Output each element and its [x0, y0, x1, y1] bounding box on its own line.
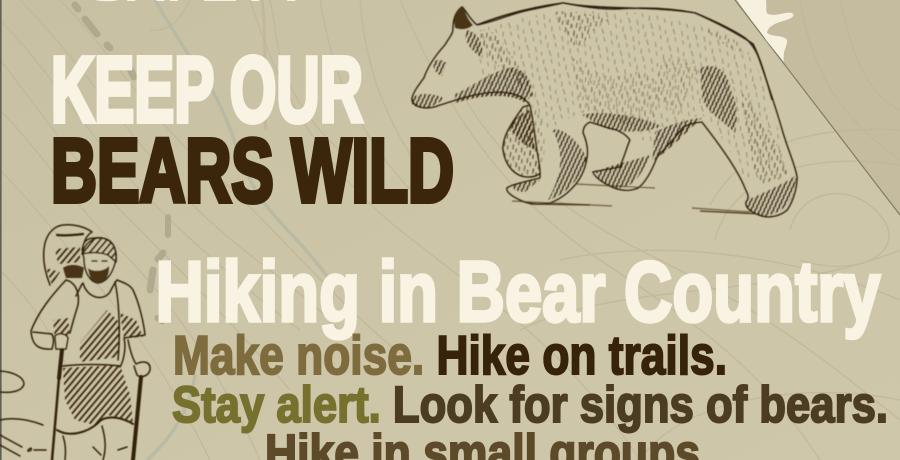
- hiker right arm: [128, 340, 150, 377]
- top contour bands: [262, 0, 266, 130]
- ground shadows: [512, 184, 760, 214]
- bear light fur texture: [473, 11, 790, 180]
- illustration: bear: [411, 3, 797, 217]
- hiker left arm: [31, 280, 66, 349]
- illustration: hiker: [0, 225, 150, 460]
- river: [147, 0, 330, 460]
- hiker torso: [83, 280, 145, 367]
- bear back outline accent: [477, 3, 772, 100]
- heading: keep our: KEEP OUR: [51, 38, 363, 142]
- hiker head and beard: [83, 238, 116, 283]
- hiker backpack: [44, 225, 92, 285]
- heading: bears wild: BEARS WILD: [51, 122, 454, 222]
- right darker panel: [735, 0, 900, 215]
- ground scribble left: [0, 371, 24, 392]
- hiker shirt shading: [80, 310, 120, 362]
- diagonal panel edge: [735, 0, 900, 215]
- hiker trekking poles: [59, 350, 62, 378]
- bear mid shading: [480, 11, 790, 185]
- hiker shorts: [63, 365, 133, 425]
- tip line 1: Make noise. Hike on trails.: [173, 324, 727, 386]
- icon: paint splat top right: [737, 0, 793, 62]
- left edge line: [0, 0, 2, 460]
- ear: [454, 7, 473, 29]
- dashed trail: [75, 5, 168, 321]
- hiker sling and legs: [57, 417, 133, 434]
- bear body: [412, 3, 797, 217]
- bear far front leg: [503, 105, 542, 177]
- bear dark shading: [411, 30, 796, 216]
